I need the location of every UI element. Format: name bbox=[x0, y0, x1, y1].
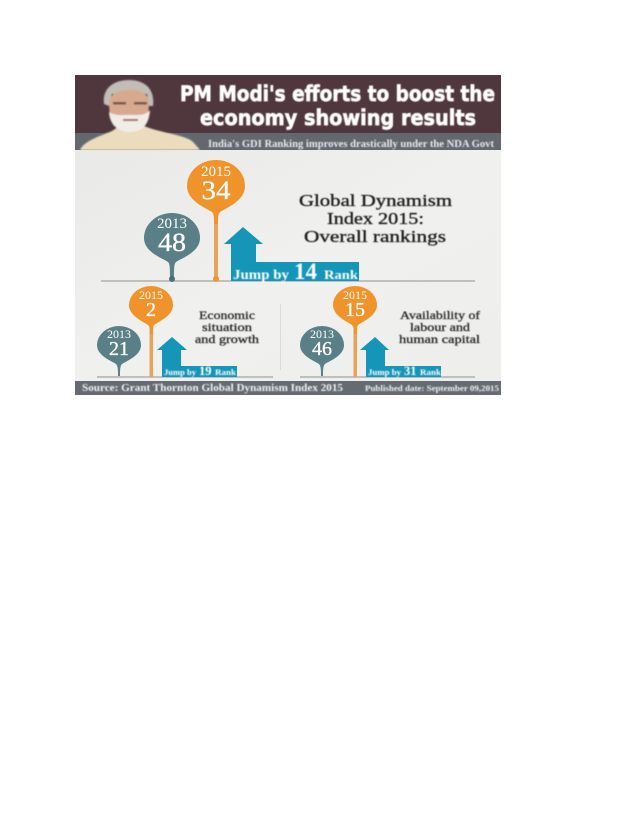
divider bbox=[280, 304, 281, 370]
title bbox=[180, 82, 495, 130]
heading: Global Dynamism Index: Global Dynamism bbox=[299, 191, 452, 210]
heading: availability: labour and bbox=[410, 322, 470, 334]
jump label: 19 bbox=[199, 364, 212, 378]
jump label bbox=[164, 364, 237, 378]
published date: Published date: September 09,2015 bbox=[365, 383, 499, 393]
pin 2013 bbox=[300, 326, 344, 376]
baseline bbox=[101, 280, 475, 282]
arrow: jump bbox=[157, 337, 237, 377]
jump label: Rank bbox=[215, 368, 237, 377]
heading: Global Dynamism Index: Index 2015: bbox=[327, 209, 424, 228]
pin 2013 bbox=[97, 326, 141, 376]
pin 2013: 2013 bbox=[310, 327, 334, 341]
title: PM Modi's efforts to boost the bbox=[180, 82, 495, 106]
pin 2013: 46 bbox=[312, 338, 332, 360]
jump label bbox=[233, 259, 358, 284]
source: Source: Grant Thornton Global Dynamism Index 2015 bbox=[82, 383, 343, 394]
jump label: Jump by bbox=[233, 267, 289, 282]
pin 2015: 34 bbox=[202, 176, 230, 205]
panel: paper background bbox=[75, 150, 501, 382]
jump label: 31 bbox=[404, 364, 416, 378]
arrow: jump bbox=[360, 337, 441, 377]
pin 2015: 2015 bbox=[201, 164, 231, 180]
panel: economic situation bbox=[97, 286, 273, 378]
arrow: jump bbox=[224, 227, 359, 281]
footer bbox=[75, 381, 501, 395]
subtitle: India's GDI Ranking improves drastically under the NDA Govt bbox=[208, 139, 494, 150]
pin 2015 bbox=[333, 286, 377, 377]
pin 2015: 15 bbox=[345, 299, 365, 321]
pin 2013: 48 bbox=[158, 228, 186, 257]
jump label bbox=[368, 364, 442, 378]
pin 2015: 2015 bbox=[139, 288, 163, 302]
panel: labour and human capital bbox=[280, 286, 480, 378]
title: economy showing results bbox=[200, 106, 476, 130]
pin 2015: 2 bbox=[146, 299, 156, 321]
heading: Global Dynamism Index: Overall rankings bbox=[304, 227, 446, 246]
pin 2013: 2013 bbox=[157, 216, 187, 232]
baseline bbox=[97, 376, 273, 378]
heading: availability bbox=[399, 310, 480, 346]
pin 2015 bbox=[129, 286, 173, 377]
pin 2013: 21 bbox=[109, 338, 129, 360]
baseline bbox=[300, 376, 475, 378]
pin 2015 bbox=[187, 160, 245, 282]
jump label: Jump by bbox=[164, 367, 197, 377]
panel: overall rankings bbox=[101, 160, 475, 284]
heading: economic situation: situation bbox=[202, 322, 252, 334]
pin 2013: 2013 bbox=[107, 327, 131, 341]
portrait bbox=[80, 80, 200, 150]
heading: Global Dynamism Index bbox=[299, 191, 452, 246]
panel: header bbox=[75, 75, 501, 150]
jump label: Rank bbox=[420, 368, 442, 377]
subtitle strip bbox=[75, 133, 501, 150]
jump label: 14 bbox=[294, 259, 318, 284]
pin 2013 bbox=[144, 213, 200, 282]
jump label: Rank bbox=[324, 268, 358, 282]
heading: availability: Availability of bbox=[400, 310, 480, 322]
heading: economic situation bbox=[195, 310, 259, 346]
pin 2015: 2015 bbox=[343, 288, 367, 302]
heading: economic situation: and growth bbox=[195, 334, 259, 346]
jump label: Jump by bbox=[368, 367, 402, 377]
heading: availability: human capital bbox=[399, 334, 480, 346]
heading: economic situation: Economic bbox=[199, 310, 255, 322]
